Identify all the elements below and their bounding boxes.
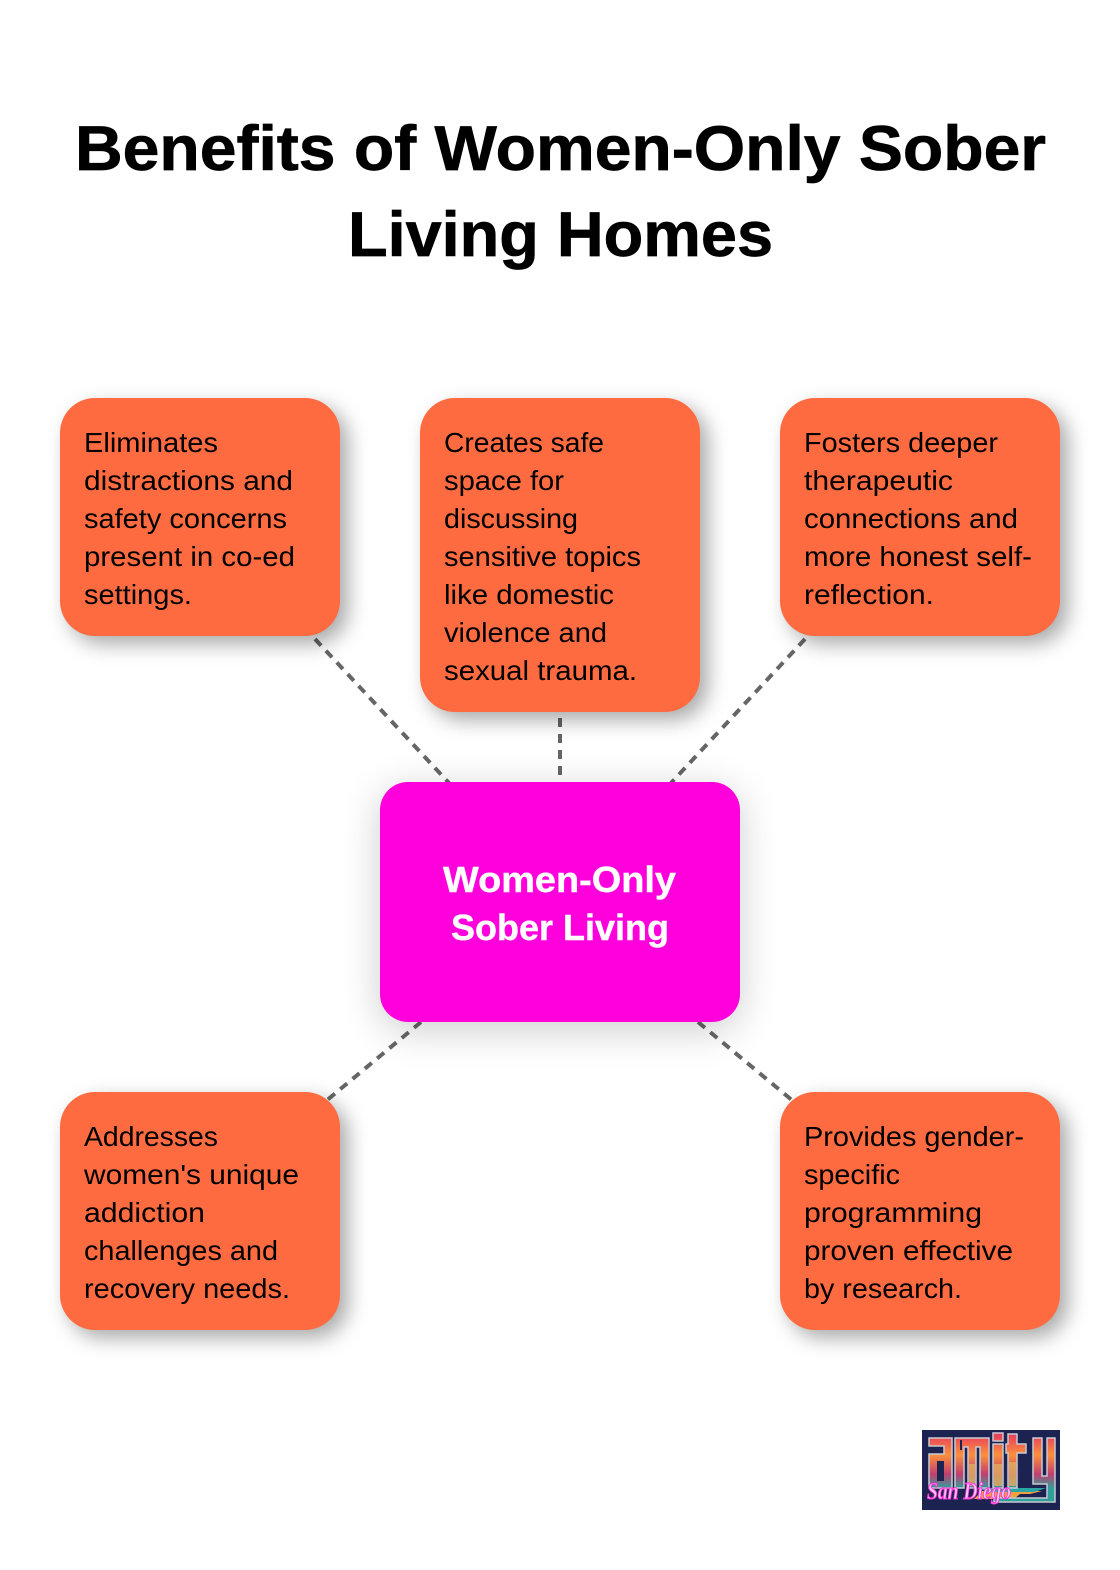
text: safe space: sensitive topics — [444, 541, 641, 572]
text: therapeutic connections: reflection. — [804, 579, 934, 610]
text: gender-specific programming: specific — [804, 1159, 900, 1190]
shoreline bands — [974, 1491, 1042, 1499]
title: Benefits of Women-Only Sober — [75, 114, 1046, 184]
text: therapeutic connections — [804, 427, 1032, 610]
text: unique challenges: challenges and — [84, 1235, 278, 1266]
panel: eliminates distractions — [60, 398, 340, 636]
text: gender-specific programming: Provides gender- — [804, 1121, 1024, 1152]
text: gender-specific programming: proven effective — [804, 1235, 1013, 1266]
text: safe space — [444, 427, 641, 686]
panel: center hub — [380, 782, 740, 1022]
text: safe space: discussing — [444, 503, 578, 534]
panel: therapeutic connections — [780, 398, 1060, 636]
text: eliminates distractions: settings. — [84, 579, 192, 610]
text: unique challenges: women's unique — [83, 1159, 299, 1190]
logo wordmark: San Diego — [927, 1479, 1011, 1505]
text: therapeutic connections: therapeutic — [804, 465, 953, 496]
panel: gender-specific programming — [780, 1092, 1060, 1330]
panel: safe space — [420, 398, 700, 712]
text: eliminates distractions: distractions and — [84, 465, 293, 496]
text: center hub: Women-Only — [443, 859, 676, 900]
text: therapeutic connections: more honest self- — [804, 541, 1032, 572]
text: eliminates distractions: safety concerns — [84, 503, 287, 534]
letter counters and towers — [937, 1440, 962, 1481]
text: safe space: violence and — [444, 617, 607, 648]
title — [75, 114, 1046, 270]
icon: Amity San Diego logo — [922, 1430, 1060, 1510]
text: unique challenges: Addresses — [84, 1121, 218, 1152]
text: eliminates distractions: present in co-ed — [84, 541, 295, 572]
text: unique challenges: recovery needs. — [84, 1273, 290, 1304]
text: center hub — [443, 859, 676, 948]
text: unique challenges: addiction — [84, 1197, 205, 1228]
amity letter shapes — [929, 1433, 1055, 1502]
text: safe space: sexual trauma. — [444, 655, 637, 686]
text: gender-specific programming: programming — [804, 1197, 982, 1228]
text: center hub: Sober Living — [451, 907, 669, 948]
panel: unique challenges — [60, 1092, 340, 1330]
text: unique challenges — [83, 1121, 299, 1304]
text: safe space: like domestic — [444, 579, 614, 610]
text: gender-specific programming — [804, 1121, 1024, 1304]
text: safe space: space for — [444, 465, 564, 496]
title: Living Homes — [348, 200, 773, 270]
text: eliminates distractions — [84, 427, 295, 610]
text: safe space: Creates safe — [444, 427, 604, 458]
text: eliminates distractions: Eliminates — [84, 427, 218, 458]
text: gender-specific programming: by research. — [804, 1273, 962, 1304]
text: therapeutic connections: Fosters deeper — [804, 427, 998, 458]
text: therapeutic connections: connections and — [804, 503, 1018, 534]
